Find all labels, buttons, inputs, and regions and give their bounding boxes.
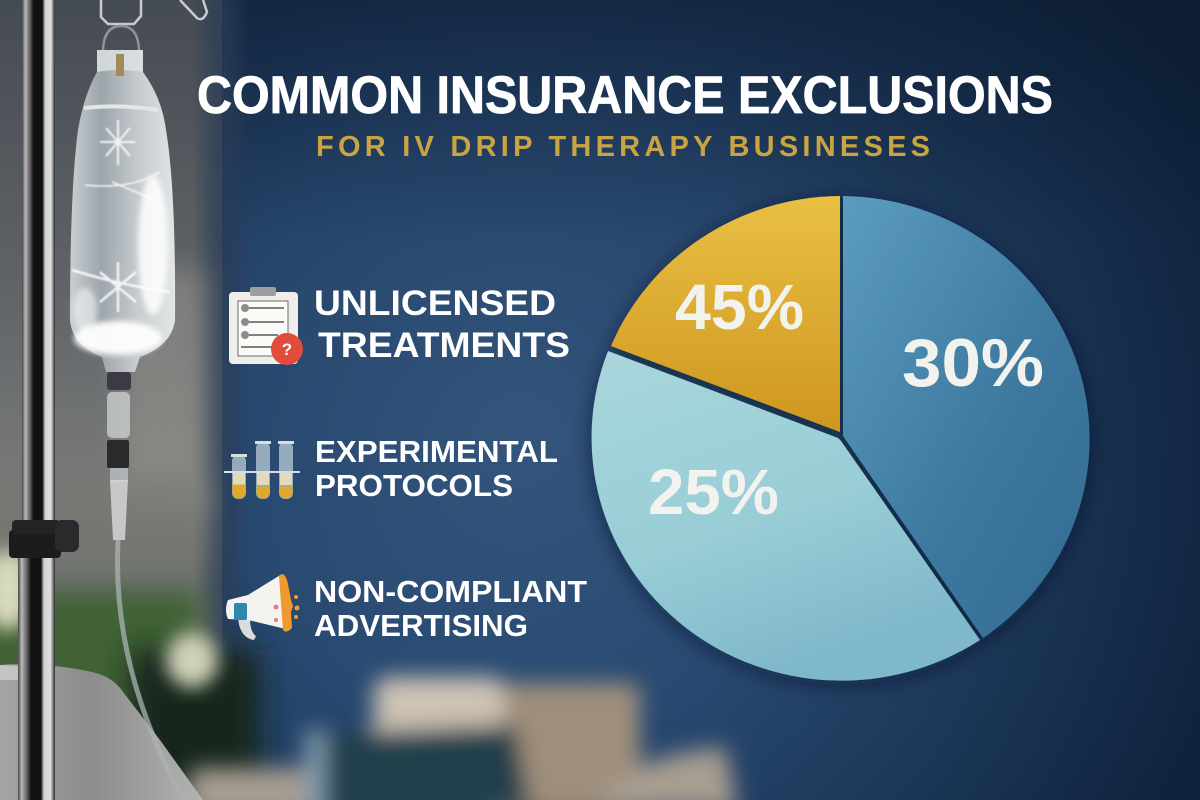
subtitle: FOR IV DRIP THERAPY BUSINESES [316,131,930,163]
icon: megaphone [226,574,300,640]
pie labels [648,271,1044,528]
pole clamp [9,520,79,558]
label: UNLICENSED [314,284,556,323]
title: COMMON INSURANCE EXCLUSIONS [197,66,1053,125]
iv pole [9,0,79,800]
slice: 30% blue [843,196,1090,638]
label 45%: 45% [675,271,804,343]
iv drip chamber and tubing [107,372,185,800]
iv hook [101,0,207,50]
item: unlicensed treatments [229,284,570,365]
icon: clipboard with alert [229,287,303,365]
icon: clipboard with alert: ? [282,340,292,359]
label: NON-COMPLIANT [314,574,587,609]
label [314,574,587,643]
slice: 45% gold [611,196,840,432]
label: EXPERIMENTAL [315,434,558,469]
bed sheet [0,664,203,800]
label [315,434,558,503]
blurred sofa [188,677,738,800]
label: TREATMENTS [318,326,570,365]
item: experimental protocols [224,434,558,503]
label [314,284,570,365]
label: PROTOCOLS [315,468,513,503]
icon: test tubes [224,441,300,499]
item: non-compliant advertising [226,574,587,643]
pie chart [592,196,1090,681]
iv bag [70,50,175,372]
label: ADVERTISING [314,608,528,643]
label 30%: 30% [902,325,1044,401]
label 25%: 25% [648,456,779,528]
slice: 25% light blue [592,351,980,681]
